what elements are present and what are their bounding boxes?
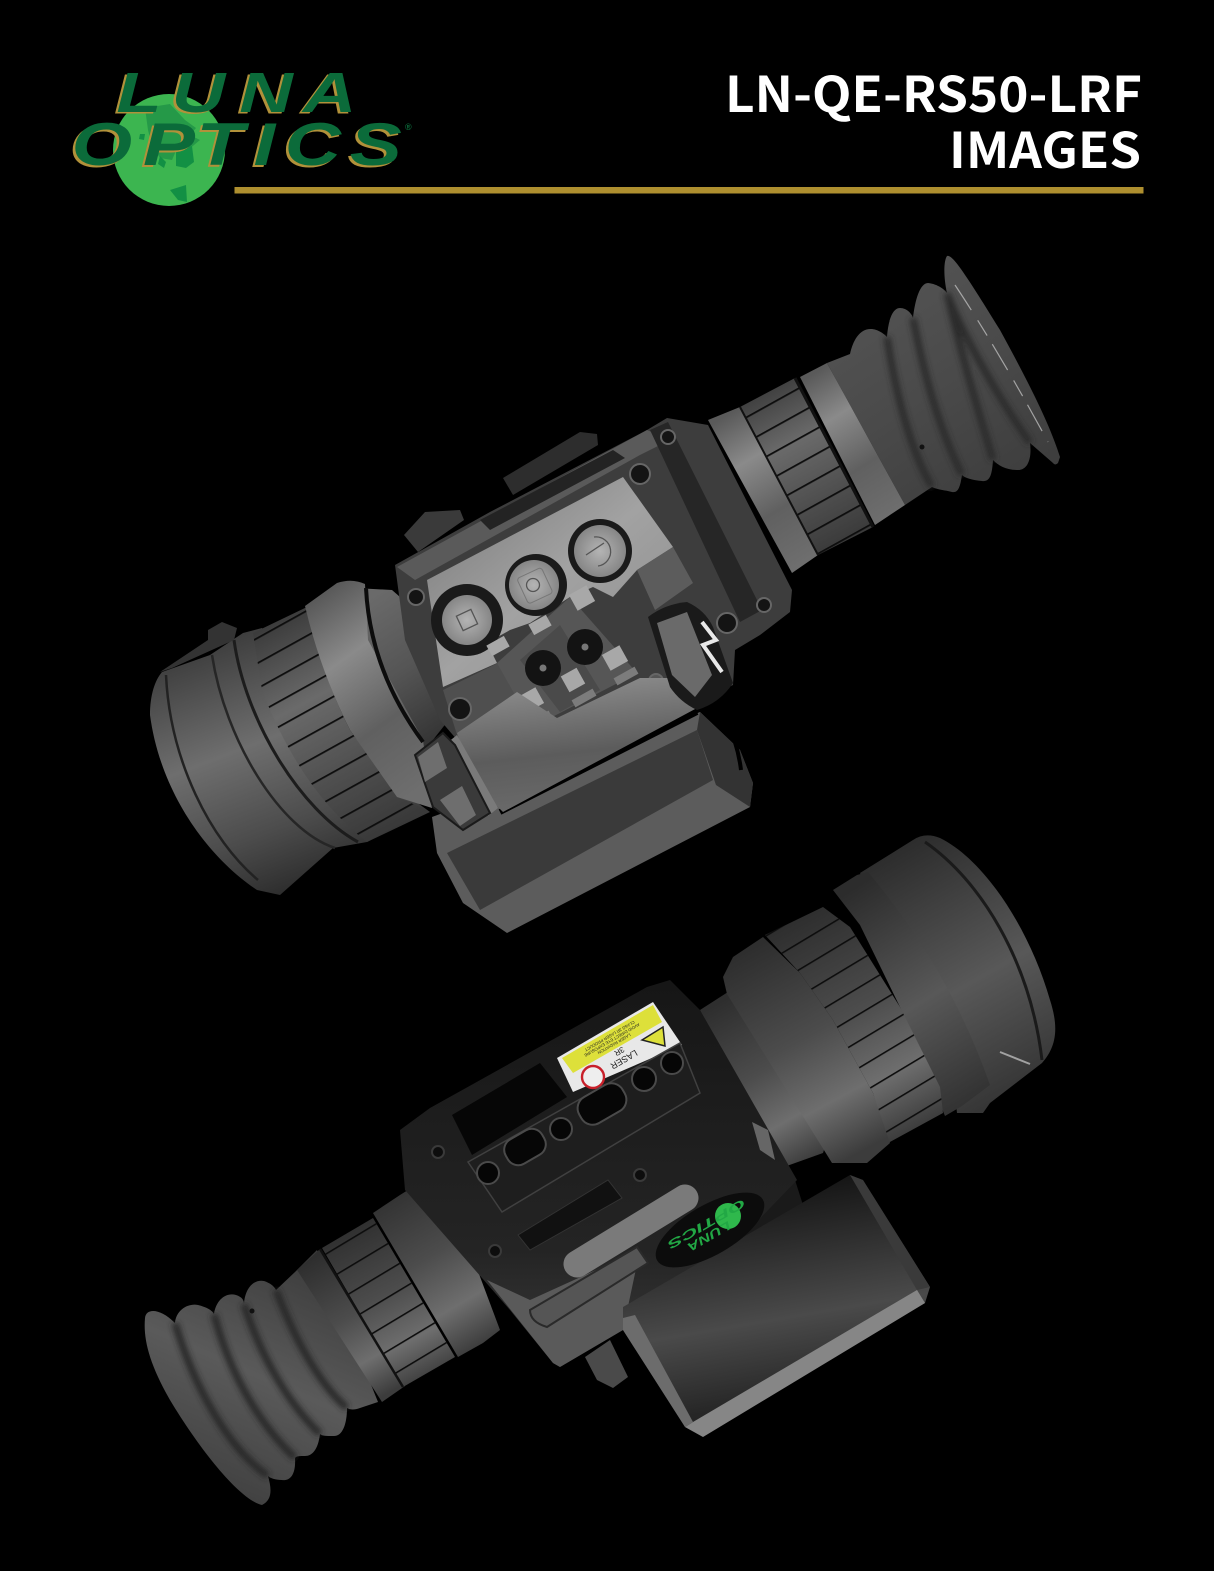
ribbed objective ring <box>765 907 943 1143</box>
lower body below panel <box>443 662 535 745</box>
logo wordmark: OPTICS <box>71 111 402 178</box>
objective lens cap <box>860 835 1055 1113</box>
side frame <box>650 422 762 622</box>
top plate strips <box>397 430 670 580</box>
tube knurled ring <box>415 733 490 830</box>
printed logo oval: OPTICS <box>665 1196 748 1252</box>
objective collar <box>723 937 890 1163</box>
side latch <box>404 510 464 552</box>
button panel <box>427 477 673 687</box>
side latch <box>585 1340 628 1388</box>
eyepiece collar <box>297 1249 405 1402</box>
eyepiece collar rear <box>708 407 818 573</box>
printed logo oval <box>645 1178 775 1282</box>
objective lens cap <box>150 622 430 895</box>
small screws <box>432 1146 646 1257</box>
logo: Luna Optics <box>69 61 412 206</box>
battery cylinder <box>623 1175 930 1437</box>
product image: bottom view of scope <box>145 835 1055 1505</box>
body housing <box>395 418 792 790</box>
battery cylinder <box>432 712 753 933</box>
function buttons <box>431 519 632 656</box>
body housing <box>400 980 797 1367</box>
rail pedestal <box>637 547 693 610</box>
ribbed focus ring <box>320 1218 455 1387</box>
logo wordmark <box>69 61 412 180</box>
serial badge <box>530 1247 648 1327</box>
lower grey body edge <box>487 1250 640 1367</box>
housing front screw <box>752 1122 775 1160</box>
strap clip <box>160 622 237 672</box>
logo wordmark: ® <box>405 122 412 132</box>
product image: top view of scope <box>150 256 1060 933</box>
ribbed objective ring <box>253 607 427 842</box>
barrel side tube <box>640 1160 803 1300</box>
laser warning label: CLASS 3R LASER PRODUCT <box>583 1020 636 1053</box>
mounting plate <box>468 1043 700 1212</box>
button: power <box>568 519 632 583</box>
objective neck <box>700 992 827 1172</box>
logo wordmark: LUNA <box>116 61 356 125</box>
no-entry symbol <box>582 1066 604 1088</box>
logo wordmark: OPTICS <box>69 113 399 180</box>
button: camera <box>505 554 567 616</box>
windage dial <box>648 602 733 710</box>
grey rail pill <box>577 1198 685 1264</box>
eyepiece collar <box>800 363 905 525</box>
title <box>725 56 1142 183</box>
logo globe <box>113 94 225 206</box>
laser warning label: LASER <box>608 1048 639 1071</box>
hazard triangle <box>642 1027 665 1046</box>
tube end ring <box>447 735 498 816</box>
objective collar <box>305 581 432 808</box>
laser warning label: 3R <box>612 1045 626 1058</box>
laser warning label: LASER RADIATION <box>597 1032 632 1055</box>
gold divider <box>234 187 1144 194</box>
top adjustment wheel <box>503 432 598 495</box>
mounting holes <box>477 1052 683 1184</box>
logo wordmark: LUNA <box>114 63 354 126</box>
title: IMAGES <box>949 112 1141 183</box>
laser warning label: AVOID DIRECT EYE EXPOSURE <box>583 1022 641 1058</box>
laser warning label <box>557 1002 682 1092</box>
laser tube <box>415 678 697 830</box>
recessed slot <box>518 1180 622 1250</box>
ribbed focus ring <box>740 378 873 555</box>
rubber band <box>833 872 990 1116</box>
title: LN-QE-RS50-LRF <box>725 56 1142 127</box>
eyecup <box>145 1250 378 1505</box>
eyecup <box>827 256 1060 505</box>
dark window <box>452 1063 567 1155</box>
body screws <box>408 430 771 720</box>
button: zoom frame <box>431 584 503 656</box>
printed logo oval: LUNA <box>685 1218 733 1254</box>
rear collar <box>373 1170 500 1357</box>
objective neck <box>355 588 455 750</box>
picatinny rail <box>486 585 638 729</box>
